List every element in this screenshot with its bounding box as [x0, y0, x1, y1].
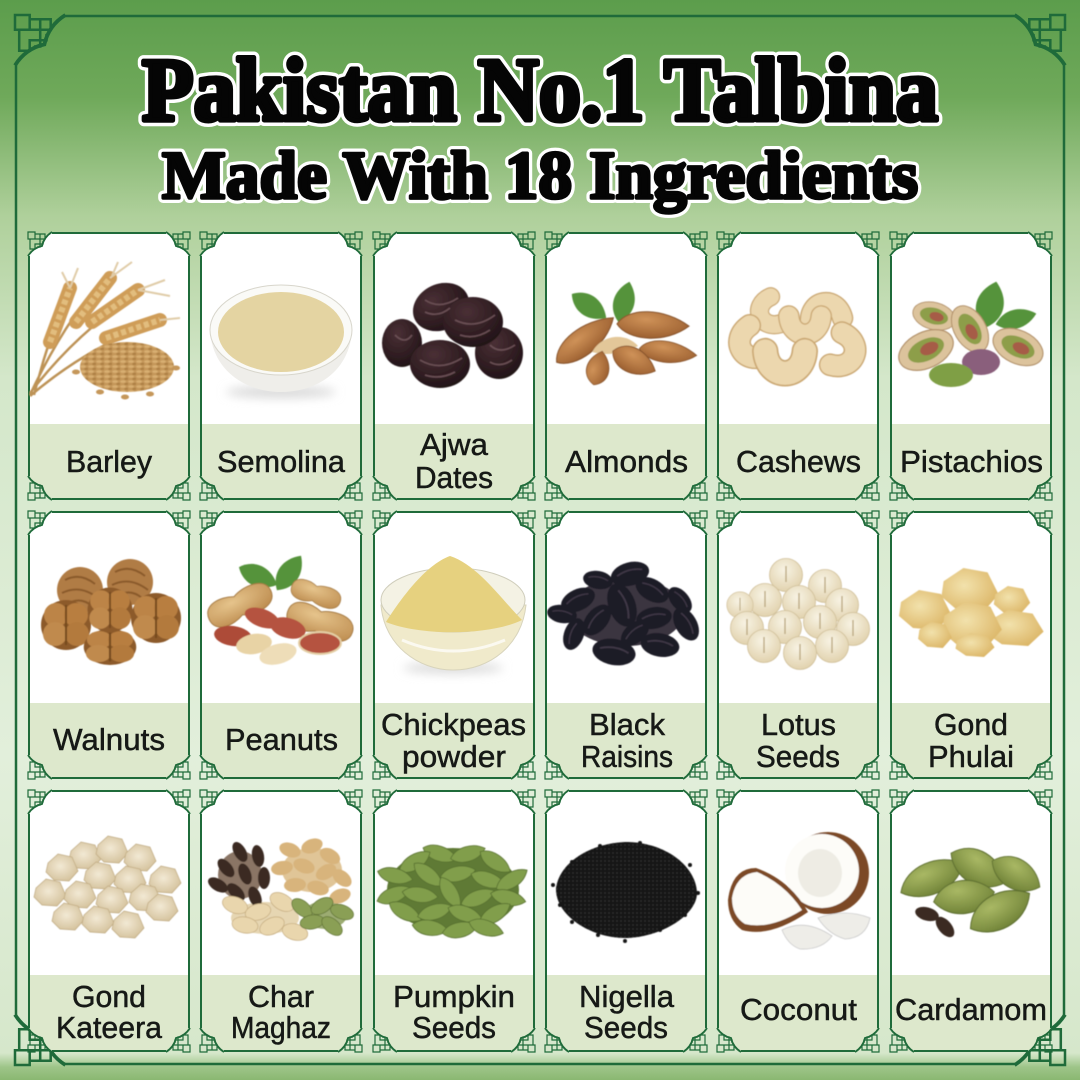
- card: Pumpkin Seeds: [373, 790, 535, 1052]
- card: Ajwa Dates: [373, 232, 535, 500]
- label: Almonds: [565, 444, 688, 479]
- card: Walnuts: [28, 511, 190, 779]
- label: Pumpkin: [393, 979, 515, 1014]
- label: Seeds: [412, 1010, 496, 1045]
- label: Gond: [934, 707, 1008, 742]
- label: Char: [248, 979, 314, 1014]
- card: Coconut: [717, 790, 879, 1052]
- label: Raisins: [581, 739, 673, 774]
- card: Black Raisins: [545, 511, 707, 779]
- label: Cardamom: [895, 992, 1047, 1027]
- icon: barley: [30, 262, 180, 400]
- label: [415, 427, 493, 495]
- card: Pistachios: [890, 232, 1052, 500]
- label: Barley: [66, 444, 152, 479]
- icon: dates: [382, 274, 523, 388]
- label: Pistachios: [900, 444, 1043, 479]
- icon: gond phulai: [899, 568, 1044, 657]
- card: Gond Phulai: [890, 511, 1052, 779]
- card: Semolina: [200, 232, 362, 500]
- label: Maghaz: [231, 1010, 331, 1045]
- icon: cashews: [733, 297, 860, 373]
- card: Gond Kateera: [28, 790, 190, 1052]
- title: Pakistan No.1 Talbina: [142, 41, 938, 140]
- card: Chickpeas powder: [373, 511, 535, 779]
- icon: coconut: [728, 832, 870, 949]
- label: Coconut: [740, 992, 857, 1027]
- label: Black: [589, 707, 665, 742]
- subtitle: Made With 18 Ingredients: [162, 137, 918, 213]
- card: Peanuts: [200, 511, 362, 779]
- label: Seeds: [584, 1010, 668, 1045]
- label: [928, 707, 1014, 774]
- card: Cashews: [717, 232, 879, 500]
- subtitle: Made With 18 Ingredients: [162, 137, 918, 213]
- label: Walnuts: [53, 722, 165, 757]
- label: Cashews: [736, 444, 861, 479]
- label: Peanuts: [225, 722, 338, 757]
- icon: nigella seeds: [551, 841, 700, 943]
- label: Ajwa: [420, 427, 489, 462]
- icon: walnuts: [41, 559, 181, 665]
- card: Nigella Seeds: [545, 790, 707, 1052]
- card: Cardamom: [890, 790, 1052, 1052]
- icon: char maghaz mix: [205, 836, 356, 943]
- icon: gond kateera: [34, 836, 181, 938]
- label: [579, 979, 675, 1045]
- label: [231, 979, 331, 1045]
- label: powder: [402, 739, 506, 774]
- title: Pakistan No.1 Talbina: [142, 41, 938, 140]
- icon: semolina bowl: [210, 285, 352, 398]
- icon: almonds: [548, 279, 698, 388]
- icon: pumpkin seeds: [374, 841, 531, 941]
- label: Dates: [415, 460, 493, 495]
- label: Semolina: [217, 444, 346, 479]
- icon: raisins: [546, 558, 704, 669]
- label: [581, 707, 673, 774]
- label: Nigella: [579, 979, 675, 1014]
- icon: pistachios: [892, 278, 1049, 387]
- card: Char Maghaz: [200, 790, 362, 1052]
- icon: peanuts: [203, 550, 357, 669]
- card: Barley: [28, 232, 190, 500]
- icon: chickpea powder bowl: [381, 556, 526, 674]
- label: [756, 707, 840, 774]
- label: [56, 979, 163, 1045]
- label: Lotus: [761, 707, 836, 742]
- card: Almonds: [545, 232, 707, 500]
- card: Lotus Seeds: [717, 511, 879, 779]
- label: Phulai: [928, 739, 1014, 774]
- label: Seeds: [756, 739, 840, 774]
- label: [393, 979, 515, 1045]
- icon: cardamom: [894, 837, 1047, 941]
- label: Kateera: [56, 1010, 163, 1045]
- label: [381, 707, 526, 774]
- icon: lotus seeds: [727, 558, 870, 670]
- label: Gond: [72, 979, 146, 1014]
- label: Chickpeas: [381, 707, 526, 742]
